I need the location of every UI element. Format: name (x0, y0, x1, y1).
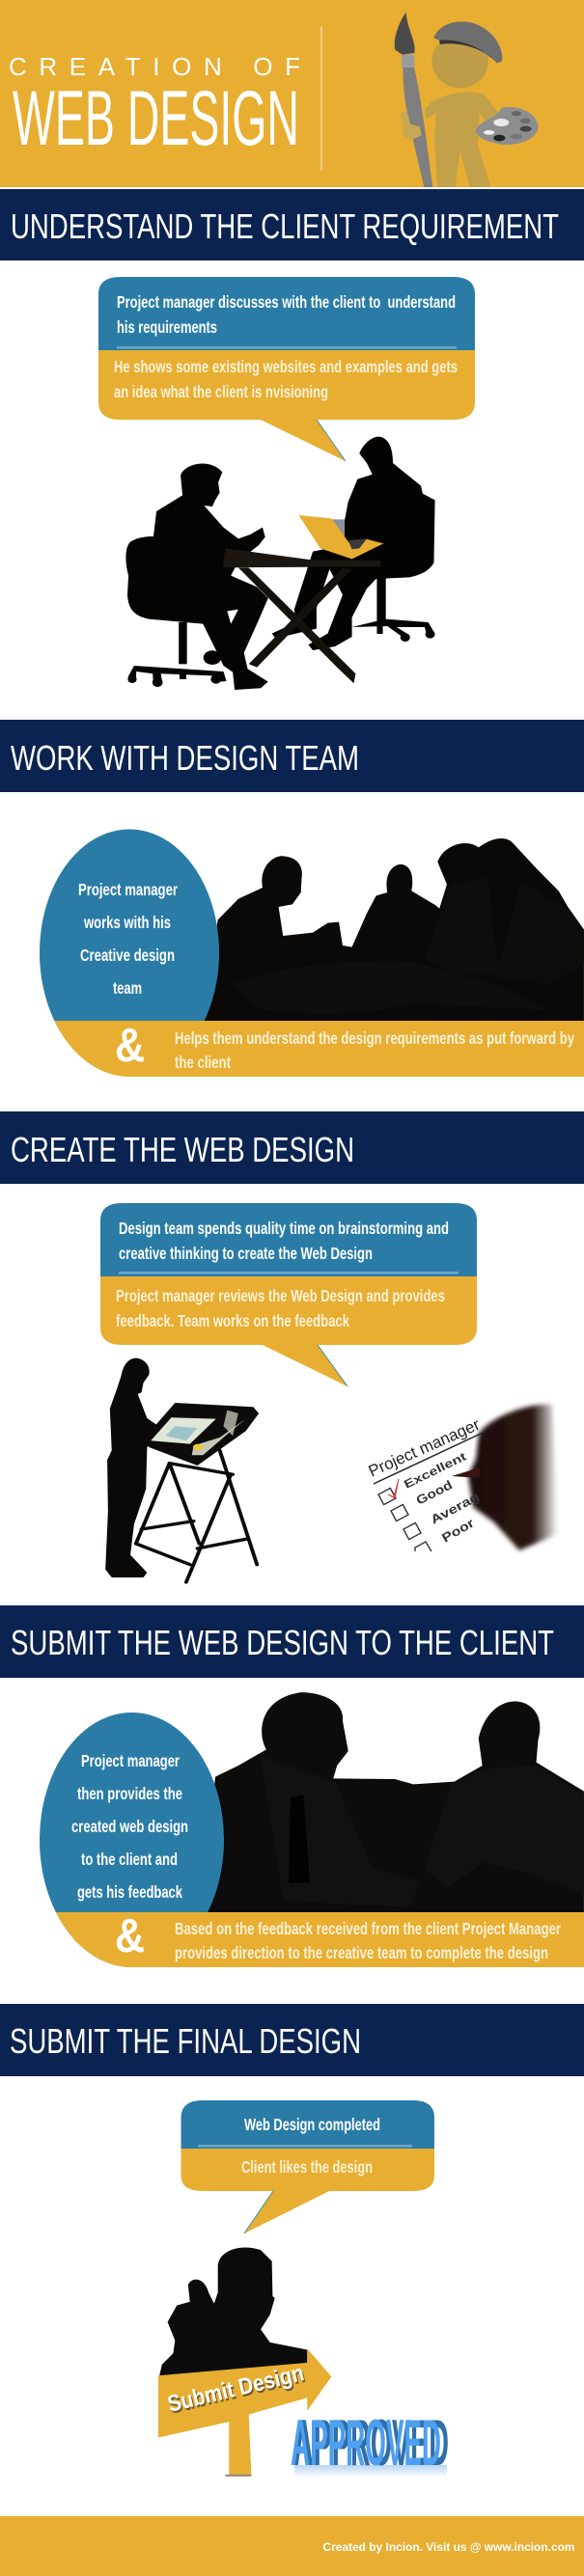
text: project manager works with team: team (113, 978, 142, 998)
text: creative thinking: creative thinking to create the Web Design (119, 1244, 373, 1263)
text: he shows existing websites: He shows some existing websites and examples and gets (114, 357, 458, 376)
header banner (0, 0, 584, 187)
text: manager provides design (71, 1751, 188, 1902)
gold band (56, 1912, 584, 1967)
photo silhouette: design team at table (201, 838, 584, 1022)
table legs (136, 1450, 257, 1582)
text: project manager reviews: Project manager reviews the Web Design and provides (116, 1286, 445, 1305)
section heading: submit the final design (0, 2004, 584, 2076)
hand holding pen (468, 1405, 558, 1550)
panel: submit to client (40, 1692, 584, 1967)
panel: work with design team (40, 830, 584, 1077)
section heading: work with design team (0, 720, 584, 792)
text: manager provides design: created web design (71, 1817, 188, 1836)
approved 3D text (291, 2406, 449, 2480)
text: project manager works with team: Project manager (78, 880, 178, 899)
designer silhouette (105, 1358, 166, 1577)
icon: painter figure with brush and palette (395, 13, 539, 187)
title: creation of: CREATION OF (9, 52, 300, 81)
drawing table top (147, 1403, 259, 1466)
speech bubble: client requirement (98, 277, 475, 461)
laptop (298, 515, 383, 559)
silhouette: left man in chair (125, 463, 268, 690)
section heading: submit the final design: SUBMIT THE FINAL DESIGN (10, 2021, 361, 2061)
text: project manager works with team (78, 880, 178, 998)
option: good: Good (414, 1477, 455, 1508)
text: web design completed: Web Design completed (244, 2115, 380, 2134)
text: based on feedback (175, 1919, 561, 1962)
text: project manager works with team: works with his (83, 913, 171, 932)
red check mark (388, 1479, 399, 1498)
option: poor: Poor (439, 1516, 477, 1546)
section heading: submit the web design to the client (0, 1605, 584, 1678)
art supplies (223, 1411, 238, 1436)
text: manager provides design: to the client and (81, 1850, 178, 1869)
text: his requirements: his requirements (117, 317, 217, 337)
blue ellipse (40, 830, 219, 1077)
section heading: understand the client requirement (0, 189, 584, 260)
section heading: create the web design (0, 1111, 584, 1184)
signpost text: Submit Design (165, 2360, 306, 2418)
section heading: work with design team: WORK WITH DESIGN TEAM (11, 738, 359, 778)
blue ellipse (40, 1713, 224, 1967)
illustration: designer at drawing table (105, 1358, 259, 1582)
pen tip (452, 1467, 480, 1478)
speech bubble: create the design (100, 1203, 477, 1386)
signpost arrow (158, 2348, 331, 2476)
illustration: thumbs-up man with signpost (158, 2247, 331, 2477)
footer: Created by Incion. Visit us @ www.incion.com (322, 2542, 575, 2554)
silhouette: right man in chair (272, 437, 435, 650)
footer (0, 2516, 584, 2576)
speech bubble: final design (181, 2100, 434, 2233)
text: client likes the design: Client likes the design (241, 2157, 373, 2177)
text: manager provides design: gets his feedback (77, 1882, 182, 1902)
option: average: Averag (428, 1490, 482, 1527)
reflection (294, 2465, 447, 2478)
title: web design: WEB DESIGN (13, 75, 299, 162)
ampersand: & (115, 1020, 145, 1072)
silhouette: man with thumb up (158, 2247, 331, 2477)
option: excellent: Excellent (402, 1449, 468, 1492)
table (223, 548, 380, 683)
text: helps them understand: the client (175, 1053, 231, 1072)
ampersand: & (115, 1910, 145, 1962)
gold band (54, 1021, 584, 1077)
text: project manager discusses: Project manager discusses with the client to understand (117, 292, 456, 312)
artwork on table (151, 1417, 216, 1444)
text: an idea: an idea what the client is nvisioning (114, 382, 328, 401)
text: manager provides design: then provides the (77, 1784, 182, 1803)
text: manager provides design: Project manager (81, 1751, 180, 1770)
illustration: manager and client at table (125, 437, 435, 690)
illustration: project manager feedback checklist (366, 1405, 558, 1551)
text: project manager works with team: Creative design (80, 945, 175, 965)
checklist heading: Project manager (366, 1415, 483, 1481)
checkboxes (378, 1488, 431, 1551)
text: design team: Design team spends quality time on brainstorming and (119, 1219, 449, 1238)
signpost text shadow: Submit Design (167, 2362, 308, 2420)
text: feedback: feedback. Team works on the feedback (116, 1311, 349, 1330)
text: helps them understand (175, 1028, 574, 1072)
section heading: create the web design: CREATE THE WEB DESIGN (11, 1130, 354, 1169)
photo silhouette: two men talking (201, 1692, 584, 1912)
